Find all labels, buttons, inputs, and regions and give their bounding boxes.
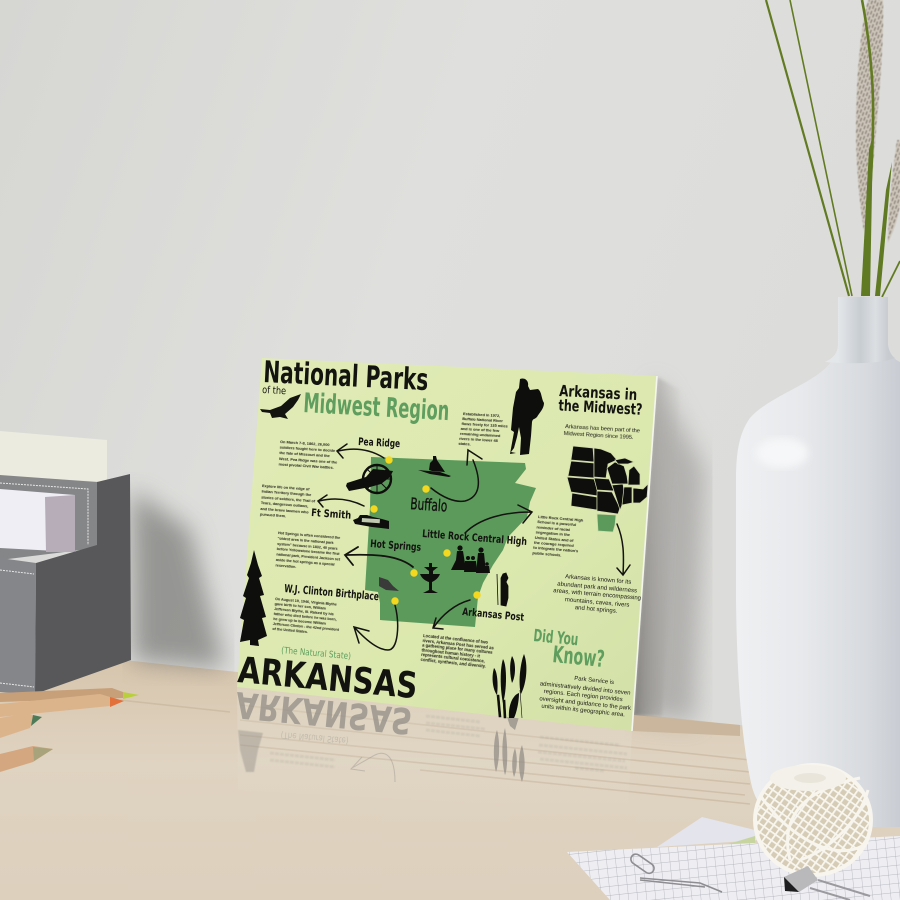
icon: eagle bbox=[260, 394, 301, 419]
text: Little Rock description: Little Rock Central High bbox=[538, 514, 584, 523]
text: Arkansas Post description: conflict, synthesis, and diversity. bbox=[420, 657, 486, 669]
text: Park Service regions: oversight and guidance to the park bbox=[539, 696, 632, 712]
text: Hot Springs description: reservation. bbox=[275, 563, 296, 569]
text: Park Service regions: units within its geographic area. bbox=[541, 704, 626, 718]
paper clips bbox=[629, 852, 722, 892]
icon: cannon silhouette bbox=[346, 465, 393, 493]
label: Little Rock Central High: Little Rock Central High bbox=[422, 528, 527, 548]
text: Hot Springs description: "oldest area in the national park bbox=[277, 536, 335, 545]
title: ARKANSAS: ARKANSAS bbox=[236, 650, 419, 707]
text: Ft Smith description: Explore life on the edge of bbox=[262, 484, 310, 492]
icon: pine tree bbox=[240, 550, 267, 646]
text: part of the Midwest region: Midwest Region since 1995. bbox=[563, 431, 634, 441]
text: Park Service regions: administratively divided into seven bbox=[540, 681, 631, 697]
text: Buffalo description: and is one of the few bbox=[461, 426, 500, 433]
text: Little Rock description: School is a powerful bbox=[537, 519, 576, 527]
vase highlight bbox=[756, 438, 808, 468]
arrows bbox=[318, 444, 630, 650]
text: Buffalo description: states. bbox=[458, 441, 471, 446]
arrow: Little Rock bbox=[465, 505, 532, 533]
text: Arkansas Post description: Located at the confluence of two bbox=[423, 633, 489, 645]
vase bbox=[736, 297, 900, 827]
front face bbox=[0, 558, 36, 695]
label: W.J. Clinton Birthplace: W.J. Clinton Birthplace bbox=[284, 582, 380, 603]
text: Arkansas Post description: represents cultural coexistence, bbox=[421, 652, 485, 664]
arrow: Clinton bbox=[354, 605, 398, 650]
text: Arkansas is known for: mountains, caves, rivers bbox=[565, 597, 630, 609]
text: Hot Springs description: aside the hot springs as a special bbox=[276, 558, 335, 567]
text: Arkansas is known for: and hot springs. bbox=[575, 605, 618, 615]
text: Hot Springs description: national park, President Jackson set bbox=[276, 553, 341, 562]
pencil: orange tip bbox=[0, 694, 110, 717]
Arkansas highlighted bbox=[597, 514, 616, 532]
cream card bbox=[0, 431, 107, 482]
organizer shadow on wall bbox=[132, 490, 225, 668]
icon: kayaker silhouette bbox=[418, 456, 451, 477]
text: Little Rock description: United States and of bbox=[535, 535, 574, 543]
ball of twine bbox=[754, 764, 872, 876]
heading: Midwest Region: Midwest Region bbox=[303, 388, 450, 427]
icon: family silhouette bbox=[451, 545, 490, 573]
arrow: Pea Ridge bbox=[337, 444, 384, 458]
heading: Arkansas in the Midwest?: Arkansas in bbox=[559, 382, 638, 404]
text: Pea Ridge description: most pivotal Civil War battles. bbox=[279, 461, 334, 470]
icon: flag bbox=[379, 577, 399, 591]
text: Little Rock description: to integrate the nation's bbox=[533, 545, 579, 554]
location labels bbox=[284, 436, 527, 624]
poster sheet bbox=[237, 358, 657, 731]
text: Park Service regions: regions. Each region provides bbox=[543, 689, 623, 703]
text: Arkansas is known for: abundant park and wilderness bbox=[557, 582, 637, 594]
subtitle: The Natural State: (The Natural State) bbox=[281, 646, 351, 662]
text: Ft Smith description: Indian Territory through the bbox=[262, 490, 311, 497]
arrow: Buffalo bbox=[431, 450, 482, 501]
green edge sheet bbox=[725, 836, 755, 845]
binder clip bbox=[784, 866, 870, 900]
text: Ft Smith description: and the brave lawmen who bbox=[260, 507, 309, 514]
text: Arkansas is known for: areas, with terrain encompassing bbox=[553, 588, 641, 602]
back sheet bbox=[657, 817, 760, 847]
panel: Did You Know bbox=[533, 626, 632, 718]
desk surface bbox=[0, 650, 900, 900]
text: Park Service regions: Park Service is bbox=[574, 676, 614, 686]
text: Ft Smith description: Tears, dangerous outlaws, bbox=[261, 501, 308, 509]
text: Hot Springs description: Hot Springs is often considered the bbox=[278, 531, 340, 540]
label: Pea Ridge: Pea Ridge bbox=[358, 436, 400, 450]
text: Clinton description: Jefferson Blythe, III. Raised by his bbox=[274, 607, 334, 616]
title bbox=[262, 355, 450, 427]
heading: Did You: Did You bbox=[533, 626, 579, 650]
wood grain bbox=[120, 700, 750, 804]
text: Hot Springs description: before Yellowstone became the first bbox=[277, 547, 340, 556]
heading: of the: of the bbox=[262, 385, 287, 397]
midwest states map bbox=[567, 446, 648, 532]
second reed plume bbox=[888, 140, 900, 243]
pencil: olive tip bbox=[0, 746, 53, 772]
reflected subtitle: (The Natural State) bbox=[280, 729, 349, 745]
pencil: green tip bbox=[0, 713, 35, 738]
reflected title: ARKANSAS bbox=[234, 683, 414, 741]
text: Arkansas Post description: rivers, Arkansas Post has served as bbox=[422, 638, 495, 650]
heading: Arkansas in the Midwest?: the Midwest? bbox=[558, 396, 643, 419]
text: Pea Ridge description: soldiers fought here to decide bbox=[280, 445, 336, 453]
text: Clinton description: gave birth to her son, William bbox=[274, 602, 327, 611]
icon: fountain silhouette bbox=[420, 563, 440, 593]
label: Ft Smith: Ft Smith bbox=[311, 507, 352, 522]
text: Pea Ridge description: West. Pea Ridge was one of the bbox=[279, 456, 338, 464]
text: Buffalo description: Buffalo National River bbox=[462, 416, 504, 423]
text: Clinton description: Jefferson Clinton - the 42nd president bbox=[273, 622, 340, 632]
icon: native figure silhouette bbox=[497, 573, 508, 606]
text: Buffalo description: remaining undammed bbox=[460, 431, 501, 438]
heading: National Parks: National Parks bbox=[263, 355, 429, 398]
poster bbox=[236, 355, 657, 731]
reflected arrow bbox=[351, 753, 395, 782]
label: Buffalo: Buffalo bbox=[410, 494, 448, 516]
text: Ft Smith description: pursued them. bbox=[260, 512, 286, 518]
coloured pencils bbox=[0, 688, 139, 772]
icon: fort building silhouette bbox=[353, 515, 389, 529]
grid paper bbox=[567, 836, 900, 900]
reflected reeds bbox=[494, 717, 525, 782]
arrow: Ft Smith bbox=[318, 495, 364, 507]
label: Hot Springs: Hot Springs bbox=[370, 538, 422, 554]
back grey panel bbox=[0, 475, 97, 560]
panel: Arkansas in the Midwest bbox=[553, 382, 648, 615]
icon: reeds bbox=[493, 654, 526, 718]
label: Arkansas Post: Arkansas Post bbox=[462, 606, 525, 624]
arrow: Midwest to text bbox=[617, 524, 630, 575]
dark side panel bbox=[35, 474, 131, 694]
text: Hot Springs description: system" because in 1832, 40 years bbox=[277, 542, 338, 551]
text: Arkansas Post description: throughout human history - it bbox=[421, 647, 481, 659]
pencil: yellow-green tip bbox=[0, 688, 123, 702]
heading: Know?: Know? bbox=[551, 642, 606, 673]
text: Little Rock description: public schools. bbox=[532, 550, 562, 557]
text: Pea Ridge description: the fate of Missouri and the bbox=[279, 450, 331, 458]
text: Arkansas Post description: a gathering place for many cultures bbox=[422, 643, 493, 655]
text: part of the Midwest region: Arkansas has been part of the bbox=[565, 424, 640, 434]
text: Clinton description: On August 19, 1946, Virginia Blythe bbox=[275, 597, 337, 607]
Arkansas state map bbox=[365, 457, 536, 627]
text: Buffalo description: Established in 1972, bbox=[463, 411, 500, 418]
reed plume bbox=[856, 0, 883, 232]
poster reflection on desk bbox=[234, 683, 632, 812]
text: Clinton description: of the United States. bbox=[272, 627, 308, 634]
text: Pea Ridge description: On March 7-8, 1862, 26,000 bbox=[280, 439, 330, 447]
papers on desk bbox=[567, 817, 900, 900]
text: Ft Smith description: stories of soldiers, the Trail of bbox=[261, 495, 316, 503]
text: Clinton description: he grew up to become William bbox=[273, 617, 327, 626]
text: Arkansas is known for: Arkansas is known for its bbox=[565, 574, 631, 586]
text: Park Service regions bbox=[539, 676, 632, 718]
icon: hiker silhouette bbox=[510, 378, 544, 455]
arrow: Arkansas Post bbox=[433, 600, 470, 629]
text: Buffalo description: flows freely for 135 miles bbox=[461, 421, 508, 429]
reflected tree bbox=[238, 730, 263, 772]
reflected text bbox=[270, 716, 627, 771]
poster shadow on wall bbox=[632, 377, 740, 736]
location dots bbox=[370, 456, 481, 605]
arrow: Hot Springs bbox=[345, 547, 413, 567]
text: Little Rock description: the courage required bbox=[534, 540, 574, 548]
text: Little Rock description: reminder of racial bbox=[536, 524, 570, 532]
plant stems and reed plumes bbox=[766, 0, 900, 297]
desk organizer bbox=[0, 431, 131, 695]
text: Little Rock description: segregation in the bbox=[535, 529, 571, 537]
white paper stack bbox=[0, 489, 75, 552]
text: Clinton description: father who died before he was born, bbox=[274, 612, 337, 622]
text: Arkansas is known for bbox=[553, 574, 641, 615]
text: Buffalo description: rivers in the lower 48 bbox=[459, 436, 499, 443]
